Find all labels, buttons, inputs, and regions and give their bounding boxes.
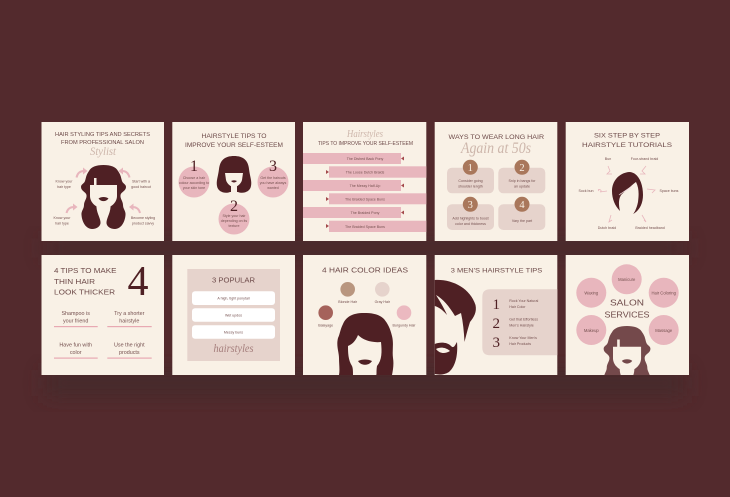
service: makeup: Makeup bbox=[584, 328, 599, 333]
panel: hairstyles list with ribbons bbox=[303, 122, 426, 241]
circle tip 2 bbox=[218, 198, 250, 234]
icon: man's hair and beard bbox=[435, 280, 476, 375]
inner panel bbox=[187, 269, 280, 361]
labels: six tutorials bbox=[579, 157, 679, 230]
service: massage: Massage bbox=[655, 328, 673, 333]
heading: SIX STEP BY STEP bbox=[594, 132, 660, 140]
service: hair coloring: Hair Coloring bbox=[651, 290, 677, 296]
tip card 2: 2 bbox=[519, 163, 525, 174]
circle tip 2: texture bbox=[228, 224, 240, 228]
circle tip 1: your skin tone bbox=[183, 186, 205, 190]
circle tip 3: wanted bbox=[267, 186, 279, 190]
labels: four tips bbox=[54, 180, 155, 226]
circle tip 2: Style your hair bbox=[223, 214, 246, 218]
circle tip 1: colour according to bbox=[179, 181, 209, 185]
panel: 3 men's hairstyle tips bbox=[435, 255, 557, 375]
ribbon 4: The Braided Space Buns bbox=[345, 198, 385, 202]
tip: haircut bbox=[107, 311, 152, 327]
heading: HAIRSTYLE TUTORIALS bbox=[582, 142, 673, 149]
tip card 2 bbox=[498, 160, 545, 193]
labels: four tips: Know your bbox=[54, 216, 71, 220]
heading bbox=[604, 298, 650, 320]
panel: 4 hair color ideas bbox=[303, 255, 426, 375]
heading bbox=[582, 132, 673, 149]
heading: LOOK THICKER bbox=[54, 290, 115, 296]
heading: 3 MEN'S HAIRSTYLE TIPS bbox=[451, 268, 543, 274]
tip: shampoo: your friend bbox=[63, 318, 88, 324]
heading: SALON bbox=[610, 298, 644, 308]
tip card 3: 3 bbox=[468, 200, 473, 211]
labels: four tips: Know your bbox=[56, 180, 73, 184]
tip card 4: Vary the part bbox=[512, 219, 532, 223]
heading: hair styling tips: FROM PROFESSIONAL SALON bbox=[61, 140, 144, 146]
tip card 4 bbox=[498, 197, 545, 230]
tip: products: Use the right bbox=[114, 342, 145, 348]
list item 1: A high, tight ponytail bbox=[217, 296, 250, 300]
tips panel bbox=[482, 289, 557, 355]
tip card 2: Snip in bangs for bbox=[509, 179, 536, 183]
swatch: gray: Gray Hair bbox=[375, 300, 391, 304]
labels: six tutorials: Dutch braid bbox=[598, 226, 616, 230]
circle tip 1: Choose a hair bbox=[183, 176, 206, 180]
circle tip 1 bbox=[178, 158, 210, 198]
tip 3: Hair Products bbox=[509, 342, 531, 346]
tip card 1 bbox=[447, 160, 494, 193]
tip: colour: Have fun with bbox=[59, 342, 92, 348]
script word: hairstyles bbox=[214, 341, 254, 355]
panel: ways to wear long hair bbox=[435, 122, 557, 241]
panel: 3 popular hairstyles bbox=[172, 255, 295, 375]
circle tip 3: 3 bbox=[269, 158, 277, 175]
labels: four tips: hair type bbox=[57, 185, 71, 189]
tip 1: Hair Color bbox=[509, 305, 526, 309]
heading: hair styling tips: HAIR STYLING TIPS AND SECRETS bbox=[55, 132, 150, 138]
heading: TIPS TO IMPROVE YOUR SELF-ESTEEM bbox=[318, 141, 413, 147]
ribbon 5: The Braided Pony bbox=[351, 211, 380, 215]
tip 2: Get that Effortless bbox=[509, 318, 538, 322]
heading: 4 TIPS TO MAKE bbox=[54, 268, 117, 275]
circle tip 3: you have always bbox=[260, 181, 286, 185]
tip: haircut: hairstyle bbox=[119, 318, 139, 324]
tip 2: 2 bbox=[493, 316, 500, 332]
icon: side-swept short hair bbox=[612, 172, 643, 214]
heading: 3 POPULAR bbox=[212, 278, 255, 284]
swatch: burgundy: Burgundy Hair bbox=[393, 324, 416, 328]
ribbon 1: The Dished Back Pony bbox=[347, 157, 383, 161]
tip card 3: Add highlights to boost bbox=[452, 216, 489, 220]
heading: THIN HAIR bbox=[54, 279, 95, 286]
heading: SERVICES bbox=[604, 310, 650, 320]
ribbon 2: The Loose Dutch Braids bbox=[346, 170, 384, 174]
list item 3: Messy buns bbox=[224, 330, 243, 334]
arrows: pink curved arrows bbox=[66, 168, 140, 213]
list item 2: Wet updos bbox=[225, 314, 242, 318]
icon: woman with fringe bbox=[337, 313, 393, 375]
panel: hair styling tips and secrets bbox=[42, 122, 164, 241]
labels: four tips: hair type bbox=[55, 222, 69, 226]
service: manicure: Manicure bbox=[618, 277, 636, 282]
heading bbox=[185, 133, 283, 149]
panel: hairstyle tips to improve self-esteem bbox=[172, 122, 295, 241]
heading: IMPROVE YOUR SELF-ESTEEM bbox=[185, 142, 283, 149]
labels: four tips: good haircut bbox=[131, 185, 151, 189]
tip: colour bbox=[54, 342, 98, 359]
swatch: balayage: Balayage bbox=[318, 324, 333, 328]
icon: long wavy hair silhouette bbox=[81, 165, 126, 229]
circle tip 2: 2 bbox=[230, 198, 238, 215]
labels: six tutorials: Braided headband bbox=[635, 226, 665, 230]
icon: woman with wavy hair bbox=[604, 326, 650, 375]
ribbon 6: The Braided Space Buns bbox=[345, 225, 385, 229]
tip: products bbox=[107, 342, 152, 359]
tip card 2: an update bbox=[514, 184, 530, 188]
tip card 4: 4 bbox=[519, 200, 525, 211]
tip: shampoo: Shampoo is bbox=[61, 311, 90, 317]
circle tip 3: Get the haircuts bbox=[260, 176, 286, 180]
tip 3: Know Your Men's bbox=[509, 336, 537, 340]
labels: six tutorials: Bun bbox=[605, 157, 611, 161]
circle tip 3 bbox=[258, 158, 288, 198]
service: waxing: Waxing bbox=[584, 290, 599, 296]
heading: 4 HAIR COLOR IDEAS bbox=[322, 268, 408, 274]
script line: Again at 50s bbox=[460, 140, 531, 157]
tip card 3: color and thickness bbox=[455, 222, 486, 226]
labels: six tutorials: Four-strand braid bbox=[631, 157, 658, 161]
tip card 1: Consider going bbox=[458, 179, 483, 183]
labels: six tutorials: Space buns bbox=[660, 189, 679, 193]
tip 2 bbox=[493, 316, 538, 332]
panel: 4 tips to make thin hair look thicker bbox=[42, 255, 164, 375]
labels: six tutorials: Sock bun bbox=[579, 189, 593, 193]
tip: products: products bbox=[119, 350, 140, 356]
big numeral 4: 4 bbox=[128, 259, 148, 305]
heading: WAYS TO WEAR LONG HAIR bbox=[449, 134, 544, 141]
labels: four tips: product savvy bbox=[132, 222, 154, 226]
panel: salon services bbox=[566, 255, 689, 375]
circle tip 2: depending on its bbox=[221, 219, 247, 223]
tip: colour: color bbox=[70, 350, 82, 356]
heading: HAIRSTYLE TIPS TO bbox=[202, 133, 267, 140]
circle tip 1: 1 bbox=[190, 158, 198, 175]
labels: four tips: Become styling bbox=[131, 216, 155, 220]
tip 3 bbox=[493, 335, 537, 351]
tip card 3 bbox=[447, 197, 494, 230]
panel: six step by step hairstyle tutorials bbox=[566, 122, 689, 241]
tip: shampoo bbox=[54, 311, 98, 327]
tip 1: Rock Your Natural bbox=[509, 299, 538, 303]
tip 3: 3 bbox=[493, 335, 500, 351]
tip 2: Men's Hairstyle bbox=[509, 324, 534, 328]
labels: four tips: Start with a bbox=[132, 180, 150, 184]
icons: small pink hairstyle sketches bbox=[598, 166, 655, 222]
tip: haircut: Try a shorter bbox=[114, 311, 145, 317]
heading bbox=[54, 268, 117, 296]
tip 1 bbox=[493, 297, 538, 313]
tip card 1: shoulder length bbox=[458, 184, 483, 188]
script word: hairstyles: Hairstyles bbox=[346, 128, 383, 140]
script word: stylist: Stylist bbox=[90, 144, 117, 158]
ribbon 3: The Messy Half-Up bbox=[350, 184, 380, 188]
tip card 1: 1 bbox=[468, 163, 473, 174]
swatch: blonde: Blonde Hair bbox=[338, 300, 358, 304]
heading: hair styling tips bbox=[55, 132, 150, 146]
icon: bob hair silhouette bbox=[217, 156, 251, 193]
tip 1: 1 bbox=[493, 297, 500, 313]
